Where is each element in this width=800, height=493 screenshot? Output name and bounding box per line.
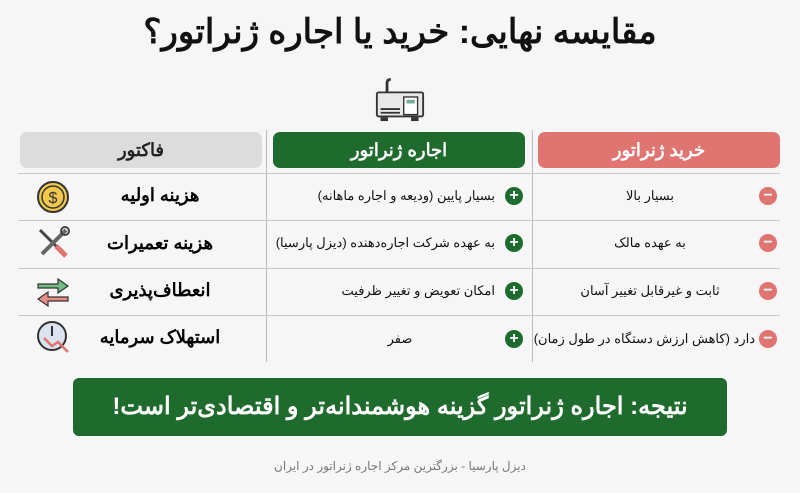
row 3: ثابت و غیرقابل تغییر آسان: [580, 283, 720, 298]
header: buy: [538, 132, 780, 168]
row 2: به عهده شرکت اجاره‌دهنده (دیزل پارسیا): [276, 235, 495, 250]
row 2: به عهده مالک: [614, 235, 686, 250]
row 4: −: [763, 330, 773, 347]
row 3: +: [509, 282, 519, 299]
row 4: دارد (کاهش ارزش دستگاه در طول زمان): [534, 331, 755, 346]
row 4: استهلاک سرمایه: [100, 327, 220, 347]
title: مقایسه نهایی: خرید یا اجاره ژنراتور؟: [143, 13, 657, 51]
conclusion banner: [73, 378, 727, 436]
conclusion banner: نتیجه: اجاره ژنراتور گزینه هوشمندانه‌تر و اقتصادی‌تر است!: [112, 393, 688, 420]
icon: clock down: [37, 321, 69, 353]
row 3: انعطاف‌پذیری: [109, 280, 211, 300]
header: factor: فاکتور: [118, 140, 164, 160]
footer: دیزل پارسیا - بزرگترین مرکز اجاره ژنراتور در ایران: [274, 459, 526, 473]
row 2: −: [763, 234, 773, 251]
row 1: −: [763, 187, 773, 204]
icon: coin: $: [49, 190, 58, 207]
header: rent: [273, 132, 525, 168]
row 2: هزینه تعمیرات: [107, 233, 213, 253]
icon: generator: [376, 78, 424, 122]
row 3: [37, 278, 777, 308]
header: buy: خرید ژنراتور: [613, 140, 705, 160]
row 3: امکان تعویض و تغییر ظرفیت: [342, 283, 495, 298]
icon: coin: [37, 181, 69, 213]
row 1: [37, 181, 777, 213]
header: rent: اجاره ژنراتور: [351, 140, 447, 160]
icon: tools: [39, 226, 70, 258]
row 1: هزینه اولیه: [121, 185, 199, 205]
row 4: صفر: [388, 331, 412, 346]
row 4: [37, 321, 777, 353]
row 2: +: [509, 234, 519, 251]
row 4: +: [509, 330, 519, 347]
row 2: [39, 226, 777, 258]
row 3: −: [763, 282, 773, 299]
icon: arrows: [37, 278, 69, 308]
header: factor: [20, 132, 262, 168]
row 1: +: [509, 187, 519, 204]
row 1: بسیار بالا: [626, 188, 674, 203]
row 1: بسیار پایین (ودیعه و اجاره ماهانه): [318, 188, 495, 203]
